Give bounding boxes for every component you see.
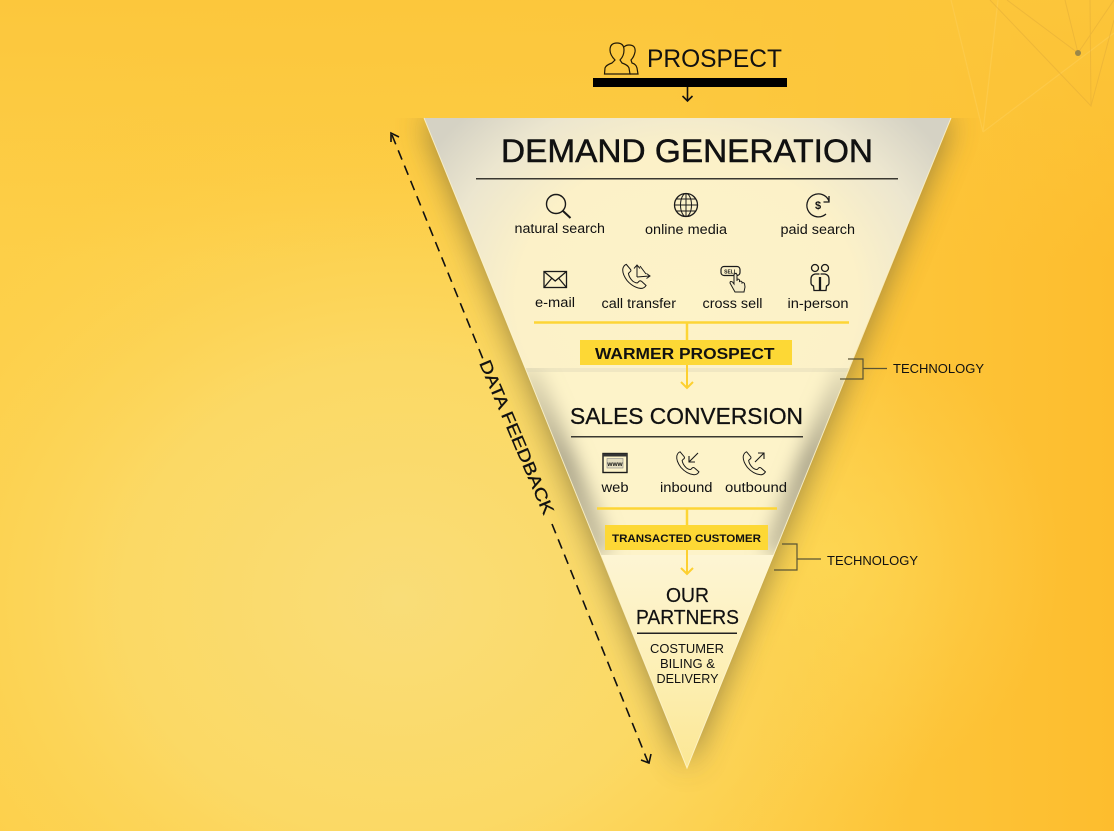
channel: natural search bbox=[514, 194, 605, 236]
channel: paid search: $ bbox=[815, 200, 821, 212]
channel: outbound: outbound bbox=[725, 480, 787, 495]
our partners heading bbox=[636, 584, 739, 634]
connector: demand to warmer prospect bbox=[534, 322, 849, 340]
connector: sales to transacted customer bbox=[597, 508, 777, 525]
arrow: warmer prospect to sales conversion bbox=[681, 365, 693, 388]
funnel bbox=[424, 118, 951, 768]
channel: inbound: inbound bbox=[660, 480, 712, 495]
partner services text: DELIVERY bbox=[656, 671, 719, 686]
channel: inbound bbox=[660, 452, 712, 495]
channel: online media bbox=[645, 194, 728, 237]
partner services text: COSTUMER bbox=[650, 641, 724, 656]
channel: call transfer: call transfer bbox=[602, 296, 677, 311]
channel: online media: online media bbox=[645, 222, 728, 237]
technology callout upper: TECHNOLOGY bbox=[893, 361, 984, 376]
prospect label: PROSPECT bbox=[647, 45, 782, 73]
technology callout lower bbox=[774, 544, 918, 570]
funnel shadow bbox=[424, 118, 951, 768]
channel: e-mail: e-mail bbox=[535, 295, 575, 310]
transacted customer badge bbox=[605, 525, 768, 550]
channel: paid search: paid search bbox=[780, 222, 855, 237]
prospect header bbox=[593, 43, 787, 101]
channel: in-person: in-person bbox=[788, 296, 848, 311]
funnel section: our partners bbox=[601, 555, 774, 768]
channel: natural search: natural search bbox=[514, 221, 605, 236]
channel: cross sell: SELL bbox=[724, 270, 737, 276]
channel: call transfer bbox=[602, 264, 677, 311]
channel: outbound bbox=[725, 452, 787, 495]
our partners heading: PARTNERS bbox=[636, 606, 739, 629]
demand generation heading: DEMAND GENERATION bbox=[501, 133, 873, 169]
channel: web: www bbox=[606, 461, 624, 468]
warmer prospect badge bbox=[580, 340, 792, 365]
channel: paid search bbox=[780, 194, 855, 237]
data feedback label: DATA FEEDBACK bbox=[475, 357, 558, 518]
technology callout upper bbox=[840, 359, 984, 379]
arrow: transacted customer to partners bbox=[681, 550, 693, 574]
channel: cross sell bbox=[702, 266, 762, 311]
transacted customer badge: TRANSACTED CUSTOMER bbox=[612, 533, 761, 545]
data feedback arrow bbox=[391, 133, 651, 763]
partner services text: BILING & bbox=[660, 656, 715, 671]
our partners heading: OUR bbox=[666, 584, 709, 607]
funnel section: demand generation bbox=[424, 118, 951, 368]
sales conversion heading: SALES CONVERSION bbox=[570, 403, 803, 429]
channel: in-person bbox=[788, 264, 848, 311]
prospect bar bbox=[593, 78, 787, 87]
technology callout lower: TECHNOLOGY bbox=[827, 553, 918, 568]
decorative network lines bbox=[951, 0, 1114, 132]
channel: e-mail bbox=[535, 272, 575, 310]
funnel section: sales conversion bbox=[525, 368, 849, 555]
partner services text bbox=[650, 641, 724, 686]
channel: web: web bbox=[600, 480, 628, 495]
channel: web bbox=[600, 454, 628, 495]
channel: cross sell: cross sell bbox=[702, 296, 762, 311]
warmer prospect badge: WARMER PROSPECT bbox=[595, 346, 775, 363]
funnel edge highlight bbox=[424, 118, 951, 768]
arrow: prospect down bbox=[682, 87, 692, 101]
icon: people bbox=[604, 43, 638, 74]
